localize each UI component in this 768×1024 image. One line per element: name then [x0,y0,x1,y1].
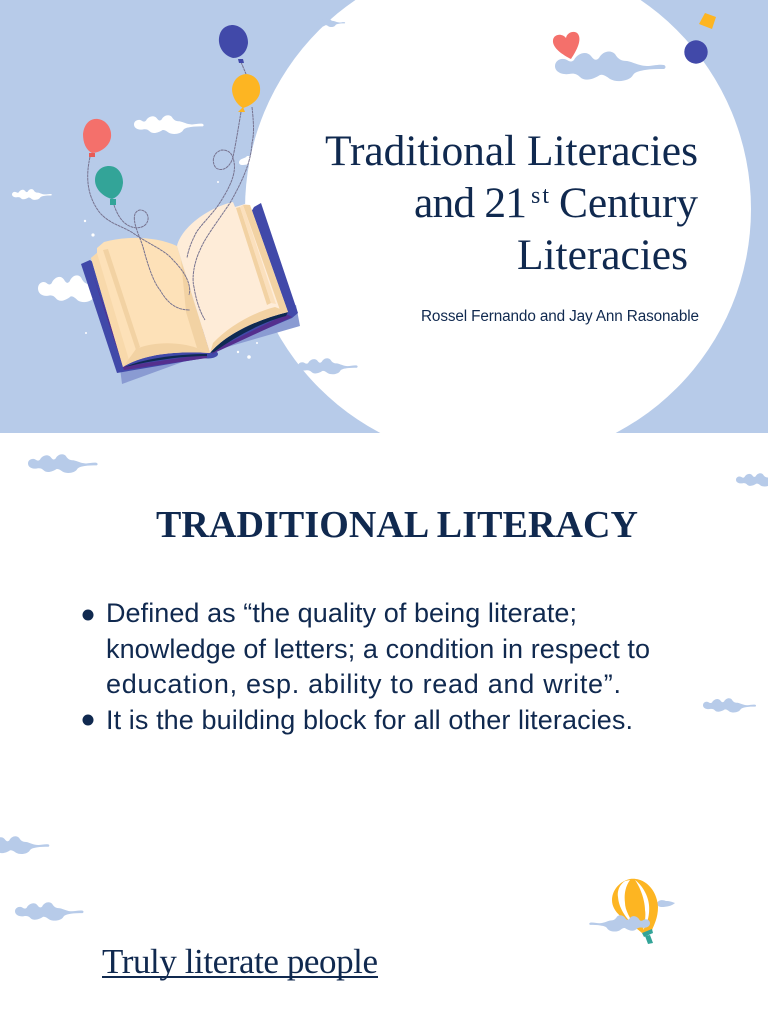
dark page shadow right [210,312,288,353]
right page bottom band [210,307,288,353]
title: and 21 [414,179,527,227]
subheading link: Truly literate people [102,942,378,981]
right page [177,202,288,353]
icon: orange diamond [699,13,716,29]
title: Traditional Literacies [325,127,698,175]
right page edge band [243,205,288,312]
panel: title slide background [0,0,768,462]
left gutter [181,260,210,353]
right page stripe [236,207,271,305]
title [325,127,698,279]
cloud: white top centre [134,115,204,134]
bullet 1: education, esp. ability to read and write”. [106,669,621,699]
decorative sparkles [84,181,258,359]
heading: TRADITIONAL LITERACY [156,504,638,546]
cloud: white left [12,189,52,200]
bullet 2: It is the building block for all other literacies. [106,705,633,735]
cloud: white behind book [38,275,118,302]
dark page shadow left [125,354,207,367]
balloon: coral [83,119,111,157]
balloon: teal [95,166,123,205]
cloud: below panel right [736,473,768,487]
icon: hot air balloon [589,879,675,944]
bullet 1 [82,598,650,699]
icon: heart [553,32,579,59]
balloon strings [88,62,254,320]
authors: Rossel Fernando and Jay Ann Rasonable [421,308,699,325]
left cover [81,260,212,373]
balloon: yellow [232,74,260,112]
cloud: lower left one [0,836,49,854]
right page light band [240,205,276,304]
spine [198,350,218,358]
left page stripe [103,249,140,350]
title: Literacies [517,231,688,279]
left page edge band [91,253,129,367]
cloud: blue near heart [555,51,666,81]
bullet list [82,598,650,735]
balloon: blue [219,25,248,63]
illustration: open book [81,202,300,384]
bullet 1: knowledge of letters; a condition in respect to [106,634,650,664]
cloud: right of list [703,698,756,712]
book shadow [120,305,300,384]
left page bottom band [123,343,210,367]
right cover [200,203,298,358]
cloud: lower left two [15,902,84,921]
inner purple edge right [212,314,292,354]
icon: blue dot [684,40,708,64]
title: Century [559,179,698,227]
cloud: blue at book lower right [298,358,358,374]
cloud: small white near circle [239,156,252,165]
cloud: blue at circle top [312,18,345,27]
cloud: below panel left [28,454,98,473]
title: st [531,183,549,209]
left page [91,238,210,367]
inner purple edge left [92,272,207,370]
bullet 1: Defined as “the quality of being literate; [106,598,577,628]
